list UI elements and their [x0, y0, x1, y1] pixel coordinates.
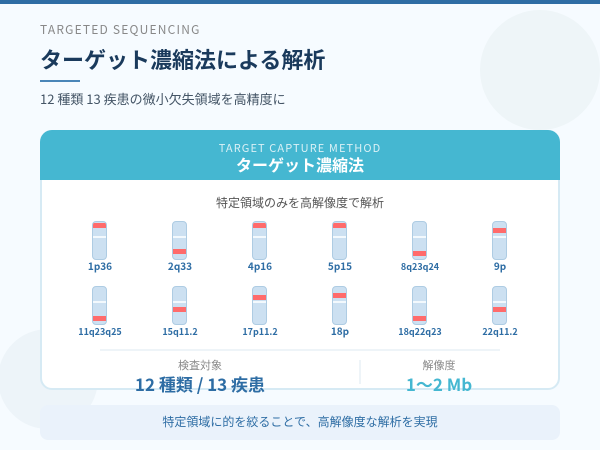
stat value: 12 種類 / 13 疾患 — [135, 371, 265, 396]
stat value: 1〜2 Mb — [406, 371, 472, 396]
top accent bar — [0, 0, 600, 4]
chromosome 11q23q25 — [78, 286, 122, 338]
chromosome 4p16 — [248, 221, 272, 273]
chromosome 18q22q23 — [398, 286, 442, 338]
chromosome 9p — [492, 221, 507, 273]
chromosome 5p15 — [328, 221, 352, 273]
title: ターゲット濃縮法による解析 — [40, 43, 325, 75]
bottom note: 特定領域に的を絞ることで、高解像度な解析を実現 — [162, 413, 438, 430]
chromosome 18q22q23: 18q22q23 — [398, 325, 442, 338]
stat label: 解像度 — [422, 357, 456, 373]
chromosome 11q23q25: 11q23q25 — [78, 325, 122, 338]
chromosome 2q33 — [168, 221, 192, 273]
panel header — [40, 130, 560, 180]
chromosome 17p11.2: 17p11.2 — [242, 325, 278, 338]
stat: targets — [135, 357, 265, 396]
decorative circle bottom left — [0, 329, 98, 429]
chromosome 15q11.2 — [162, 286, 198, 338]
chromosome 9p: 9p — [494, 258, 506, 273]
chromosome 8q23q24: 8q23q24 — [401, 260, 439, 273]
chromosome 2q33: 2q33 — [168, 258, 192, 273]
stats divider — [100, 349, 500, 351]
stat label: 検査対象 — [178, 357, 222, 373]
stat: resolution — [406, 357, 472, 396]
chromosome row 2 — [78, 286, 518, 338]
chromosome row 1 — [88, 221, 507, 273]
chromosome 1p36: 1p36 — [88, 258, 112, 273]
chromosome 4p16: 4p16 — [248, 258, 272, 273]
chromosome 15q11.2: 15q11.2 — [162, 325, 198, 338]
chromosome 22q11.2 — [482, 286, 518, 338]
title underline — [40, 80, 80, 82]
panel: target capture method — [40, 130, 560, 390]
chromosome 18p — [331, 286, 349, 338]
chromosome 17p11.2 — [242, 286, 278, 338]
bottom note — [40, 405, 560, 440]
stat column divider — [359, 360, 361, 384]
chromosome 5p15: 5p15 — [328, 258, 352, 273]
chromosome 22q11.2: 22q11.2 — [482, 325, 518, 338]
subtitle: 12 種類 13 疾患の微小欠失領域を高精度に — [40, 89, 286, 108]
header japanese title: ターゲット濃縮法 — [236, 152, 364, 176]
decorative circle top right — [480, 10, 600, 130]
chromosome 18p: 18p — [331, 323, 349, 338]
header english label: TARGET CAPTURE METHOD — [219, 140, 381, 156]
chromosome 8q23q24 — [401, 221, 439, 273]
panel caption: 特定領域のみを高解像度で解析 — [216, 194, 384, 211]
eyebrow label: TARGETED SEQUENCING — [40, 21, 201, 38]
chromosome 1p36 — [88, 221, 112, 273]
